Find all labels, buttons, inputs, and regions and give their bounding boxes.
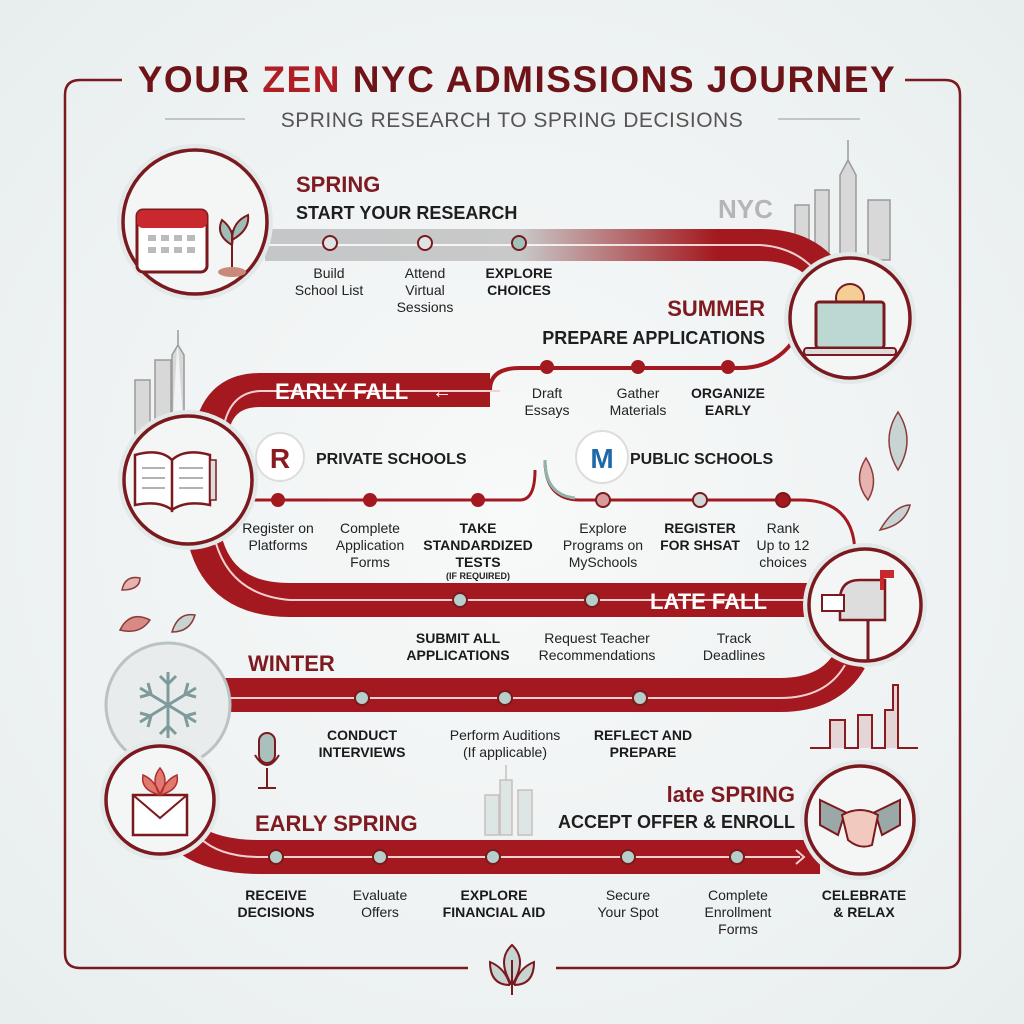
row3 labels: MySchools <box>569 554 637 570</box>
summer dots <box>540 360 735 374</box>
row3 labels: Explore <box>579 520 627 536</box>
spring heading <box>296 172 517 223</box>
summer labels: Gather <box>617 385 660 401</box>
winter labels: (If applicable) <box>463 744 547 760</box>
winter labels: INTERVIEWS <box>319 744 405 760</box>
thin lines row3 <box>250 470 535 500</box>
summer labels <box>524 385 765 418</box>
spring labels: & RELAX <box>833 904 895 920</box>
public schools <box>576 431 773 483</box>
late fall label: LATE FALL <box>650 589 767 614</box>
late fall labels: Recommendations <box>539 647 655 663</box>
skyline right small <box>810 685 918 748</box>
spring labels: Evaluate <box>353 887 407 903</box>
frame <box>65 80 960 968</box>
circle: snowflake <box>106 643 230 767</box>
track: early fall band <box>210 390 490 440</box>
private dots <box>271 493 485 507</box>
winter dots <box>355 691 647 705</box>
early spring heading: EARLY SPRING <box>255 811 418 836</box>
spring labels: Your Spot <box>598 904 659 920</box>
spring labels: RECEIVE <box>245 887 307 903</box>
spring labels <box>237 887 906 937</box>
private schools: PRIVATE SCHOOLS <box>316 451 467 468</box>
summer labels: Draft <box>532 385 562 401</box>
late fall labels: SUBMIT ALL <box>416 630 501 646</box>
spring dots <box>323 236 526 250</box>
late spring heading <box>558 782 795 832</box>
row3 labels: Forms <box>350 554 390 570</box>
row3 labels: REGISTER <box>664 520 736 536</box>
summer heading <box>542 296 765 348</box>
winter heading: WINTER <box>248 651 335 676</box>
early fall label: ← <box>432 381 452 403</box>
winter labels <box>319 727 692 760</box>
spring labels: DECISIONS <box>237 904 315 920</box>
row3 labels: Complete <box>340 520 400 536</box>
late fall labels: Deadlines <box>703 647 765 663</box>
late spring heading: ACCEPT OFFER & ENROLL <box>558 812 795 832</box>
summer heading: SUMMER <box>667 296 765 321</box>
winter labels: PREPARE <box>610 744 676 760</box>
early fall label: EARLY FALL <box>275 379 408 404</box>
spring dots <box>269 850 744 864</box>
NYC label: NYC <box>718 194 773 224</box>
skyline left <box>135 330 184 435</box>
track: winter band <box>225 660 850 695</box>
title: YOUR ZEN NYC ADMISSIONS JOURNEY <box>138 59 896 100</box>
spring labels: Sessions <box>397 299 453 315</box>
summer labels: Essays <box>524 402 570 418</box>
spring labels: Offers <box>361 904 399 920</box>
winter labels: Perform Auditions <box>450 727 560 743</box>
row3 labels: Rank <box>767 520 800 536</box>
track: row1 <box>265 245 830 280</box>
spring heading: START YOUR RESEARCH <box>296 203 517 223</box>
late fall labels: APPLICATIONS <box>406 647 510 663</box>
spring labels: Secure <box>606 887 650 903</box>
row3 labels: Up to 12 <box>757 537 810 553</box>
late spring heading: late SPRING <box>667 782 795 807</box>
private schools <box>256 433 467 481</box>
skyline top right <box>795 140 890 260</box>
row3 labels: Programs on <box>563 537 643 553</box>
skyline middle <box>485 765 532 835</box>
spring labels: Enrollment <box>705 904 772 920</box>
spring labels: CHOICES <box>487 282 551 298</box>
row3 labels: Register on <box>242 520 314 536</box>
row3 labels: (IF REQUIRED) <box>446 571 510 581</box>
circle: mailbox <box>803 543 927 667</box>
leaves left <box>120 578 195 632</box>
spring labels: Build <box>313 265 345 281</box>
circle: summer laptop <box>784 252 916 384</box>
track: late fall band <box>205 540 820 600</box>
icon: microphone <box>255 733 279 788</box>
spring labels: School List <box>295 282 363 298</box>
circle: book <box>118 410 258 550</box>
spring labels: Forms <box>718 921 758 937</box>
summer labels: EARLY <box>705 402 752 418</box>
circle: handshake <box>800 760 920 880</box>
late fall dots <box>453 593 599 607</box>
late fall labels: Request Teacher <box>544 630 650 646</box>
summer labels: Materials <box>610 402 666 418</box>
summer labels: ORGANIZE <box>691 385 765 401</box>
summer heading: PREPARE APPLICATIONS <box>542 328 765 348</box>
leaves right <box>859 412 910 530</box>
row3 labels: Platforms <box>248 537 308 553</box>
icon: bottom leaf <box>490 945 534 995</box>
circle: spring calendar <box>117 144 273 300</box>
row3 labels: TESTS <box>455 554 501 570</box>
row3 labels: choices <box>759 554 807 570</box>
row3 labels <box>242 520 810 581</box>
row3 labels: STANDARDIZED <box>423 537 533 553</box>
late fall labels <box>406 630 765 663</box>
spring heading: SPRING <box>296 172 380 197</box>
public dots <box>596 493 790 507</box>
track: row2 summer <box>490 330 800 390</box>
spring labels: CELEBRATE <box>822 887 906 903</box>
spring labels: Complete <box>708 887 768 903</box>
spring labels: EXPLORE <box>486 265 552 281</box>
spring labels: Virtual <box>405 282 445 298</box>
spring labels <box>295 265 552 315</box>
public schools: M <box>590 443 614 474</box>
row3 labels: Application <box>336 537 404 553</box>
circle: envelope lotus <box>100 740 220 860</box>
spring labels: FINANCIAL AID <box>443 904 545 920</box>
row3 labels: TAKE <box>459 520 497 536</box>
private schools: R <box>270 443 290 474</box>
track: spring band <box>190 840 820 857</box>
winter labels: CONDUCT <box>327 727 397 743</box>
subtitle: SPRING RESEARCH TO SPRING DECISIONS <box>281 109 743 132</box>
spring labels: EXPLORE <box>461 887 527 903</box>
public schools: PUBLIC SCHOOLS <box>630 451 773 468</box>
row3 labels: FOR SHSAT <box>660 537 740 553</box>
late fall labels: Track <box>717 630 752 646</box>
spring labels: Attend <box>405 265 445 281</box>
winter labels: REFLECT AND <box>594 727 692 743</box>
